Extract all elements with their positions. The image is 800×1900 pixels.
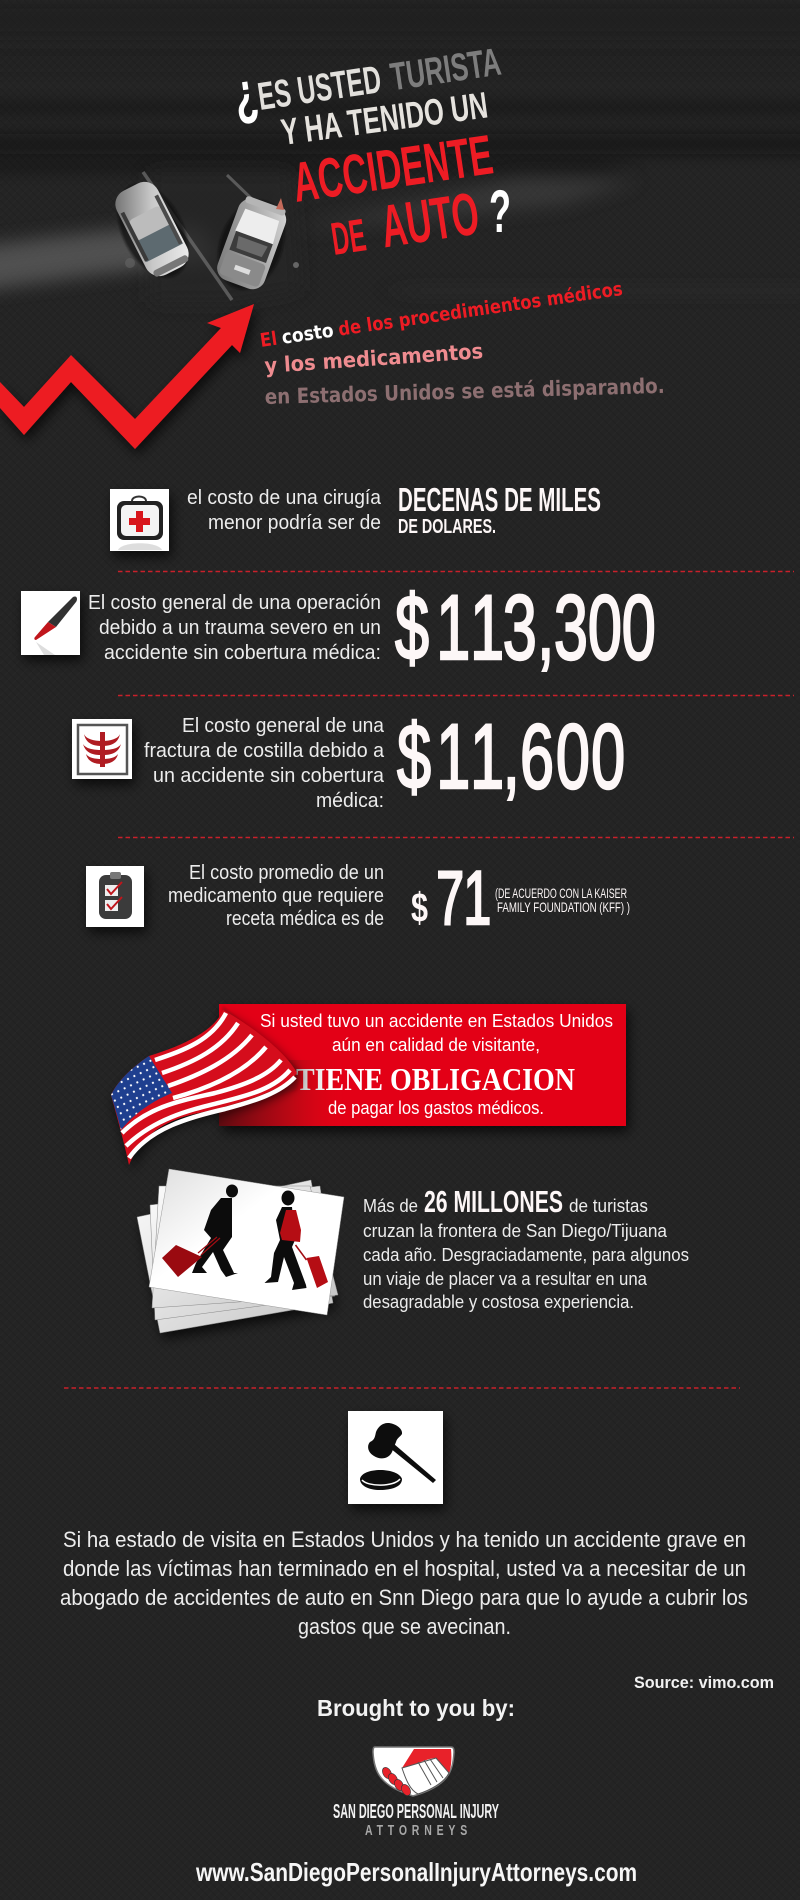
icon: rib cage (72, 719, 132, 779)
silhouette: man with suitcase (162, 1184, 238, 1277)
subtitle: cost of procedures: y los medicamentos (264, 339, 484, 378)
row: severe trauma operation cost: $113,300 (395, 575, 656, 679)
row: minor surgery cost (110, 481, 601, 551)
row: rib fracture cost (72, 704, 625, 812)
logo: San Diego Personal Injury Attorneys: SAN DIEGO PERSONAL INJURY (333, 1801, 499, 1823)
subtitle: cost of procedures: El (259, 328, 279, 352)
row: minor surgery cost: DECENAS DE MILES (398, 481, 601, 518)
title: TURISTA (388, 41, 504, 99)
icon: judge gavel (348, 1411, 443, 1504)
text: 26 million tourists: de turistas (569, 1196, 648, 1216)
logo: San Diego Personal Injury Attorneys (333, 1747, 499, 1838)
row: rib fracture cost: un accidente sin cobertura (153, 765, 385, 787)
arrow: rising cost zigzag (0, 304, 254, 449)
row: rib fracture cost: $11,600 (397, 704, 625, 808)
logo: San Diego Personal Injury Attorneys: ATTORNEYS (365, 1821, 467, 1838)
closing paragraph (60, 1527, 748, 1639)
top photo card (149, 1169, 344, 1315)
subtitle: cost of procedures: costo (280, 320, 335, 349)
row: severe trauma operation cost: accidente sin cobertura médica: (104, 642, 381, 664)
title: ¿ (229, 58, 262, 128)
icon: silver car left (103, 173, 202, 289)
closing paragraph: abogado de accidentes de auto en Snn Diego para que lo ayude a cubrir los (60, 1585, 748, 1610)
title: Y HA TENIDO UN (279, 84, 490, 153)
text: 26 million tourists: Más de (363, 1196, 418, 1216)
photo: crashed cars (103, 172, 300, 302)
icon: clipboard checklist (86, 866, 144, 927)
row: average prescription cost: receta médica es de (226, 908, 384, 930)
icon: silver car right (206, 191, 296, 299)
banner: obligation to pay: de pagar los gastos médicos. (328, 1098, 544, 1118)
icon: waving US flag (111, 1010, 297, 1165)
banner: obligation to pay: aún en calidad de visitante, (332, 1035, 540, 1055)
banner: obligation to pay: TIENE OBLIGACION (296, 1061, 575, 1097)
row: severe trauma operation cost: debido a un trauma severo en un (99, 617, 381, 639)
title: ? (489, 178, 511, 245)
text: 26 million tourists: 26 MILLONES (424, 1184, 563, 1219)
subtitle: cost of procedures (259, 278, 665, 409)
title: ACCIDENTE (289, 123, 497, 214)
closing paragraph: donde las víctimas han terminado en el hospital, usted va a necesitar de un (63, 1556, 746, 1581)
website url: www.SanDiegoPersonalInjuryAttorneys.com (195, 1857, 637, 1887)
row: minor surgery cost: DE DOLARES. (398, 516, 496, 538)
text: 26 million tourists: desagradable y costosa experiencia. (363, 1292, 634, 1312)
row: minor surgery cost: el costo de una cirugía (187, 487, 382, 509)
row: average prescription cost: (DE ACUERDO CON LA KAISER (495, 885, 627, 901)
row: severe trauma operation cost: El costo general de una operación (88, 592, 381, 614)
silhouette: woman with suitcase (264, 1190, 328, 1290)
closing paragraph: gastos que se avecinan. (298, 1614, 511, 1639)
row: average prescription cost: medicamento que requiere (168, 885, 384, 907)
icon: handshake shield (373, 1747, 454, 1797)
title (229, 41, 511, 268)
row: minor surgery cost: menor podría ser de (208, 512, 381, 534)
source note: Source: vimo.com (634, 1673, 774, 1692)
row: rib fracture cost: médica: (316, 790, 384, 812)
banner: obligation to pay: Si usted tuvo un accidente en Estados Unidos (260, 1011, 613, 1031)
text: 26 million tourists: cada año. Desgraciadamente, para algunos (363, 1245, 689, 1265)
text: 26 million tourists: un viaje de placer va a resultar en una (363, 1269, 648, 1289)
header road streaks (0, 0, 800, 294)
icon: first aid kit (110, 489, 169, 551)
title: DE (328, 208, 369, 265)
title: AUTO (376, 180, 483, 260)
row: average prescription cost: El costo promedio de un (189, 862, 384, 884)
text: 26 million tourists (363, 1184, 689, 1312)
title: ES USTED (255, 58, 384, 119)
banner: obligation to pay (219, 1004, 626, 1126)
brought to you by: Brought to you by: (317, 1695, 515, 1721)
row: average prescription cost: 71 (436, 856, 491, 941)
row: average prescription cost (86, 856, 630, 941)
subtitle: cost of procedures: en Estados Unidos se está disparando. (264, 374, 665, 409)
row: average prescription cost: $ (411, 884, 428, 931)
row: rib fracture cost: fractura de costilla debido a (144, 740, 385, 762)
closing paragraph: Si ha estado de visita en Estados Unidos y ha tenido un accidente grave en (63, 1527, 746, 1552)
row: rib fracture cost: El costo general de una (182, 715, 385, 737)
icon: scalpel (21, 591, 80, 655)
subtitle: cost of procedures: de los procedimientos médicos (337, 278, 624, 341)
photo stack: tourists walking with luggage (137, 1169, 344, 1333)
text: 26 million tourists: cruzan la frontera de San Diego/Tijuana (363, 1221, 668, 1241)
row: average prescription cost: FAMILY FOUNDATION (KFF) ) (497, 899, 630, 915)
row: severe trauma operation cost (21, 575, 656, 679)
